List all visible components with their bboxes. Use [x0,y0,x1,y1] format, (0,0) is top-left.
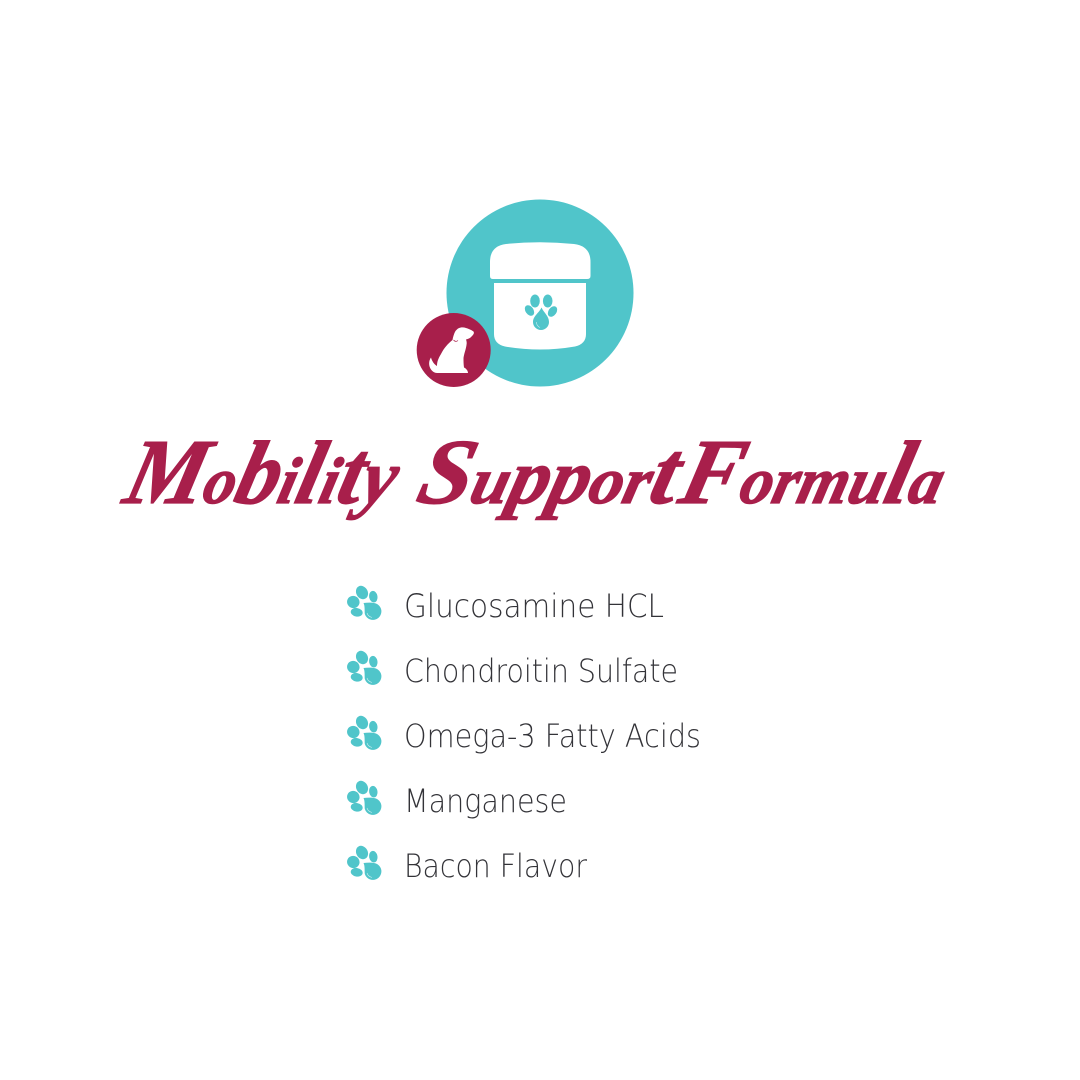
icon: jar badge [446,200,634,386]
jar lid [490,242,590,279]
label: Glucosamine HCL [404,587,664,625]
icon: jar paw with drop [523,294,559,330]
icon: paw bullet [345,584,381,620]
list item: Omega-3 Fatty Acids [345,714,701,755]
jar body [494,283,586,350]
ingredient list [345,584,701,885]
icon: paw bullet [345,844,381,880]
list item: Bacon Flavor [345,844,588,885]
icon: dog badge [417,313,491,387]
icon: paw bullet [345,779,381,815]
label: Omega-3 Fatty Acids [404,717,701,755]
label: Chondroitin Sulfate [404,652,678,690]
list item: Chondroitin Sulfate [345,649,678,690]
icon: paw bullet [345,649,381,685]
label: Manganese [404,782,567,820]
icon: sitting dog [429,327,474,373]
title word: Formula: Formula [670,421,958,524]
title word: Mobility: Mobility [114,421,412,524]
teal circle [446,200,634,386]
title [114,421,958,524]
title word: Support: Support [409,421,695,524]
list item: Glucosamine HCL [345,584,664,625]
icon: paw bullet [345,714,381,750]
crimson circle [417,313,491,387]
label: Bacon Flavor [404,847,588,885]
list item: Manganese [345,779,567,820]
